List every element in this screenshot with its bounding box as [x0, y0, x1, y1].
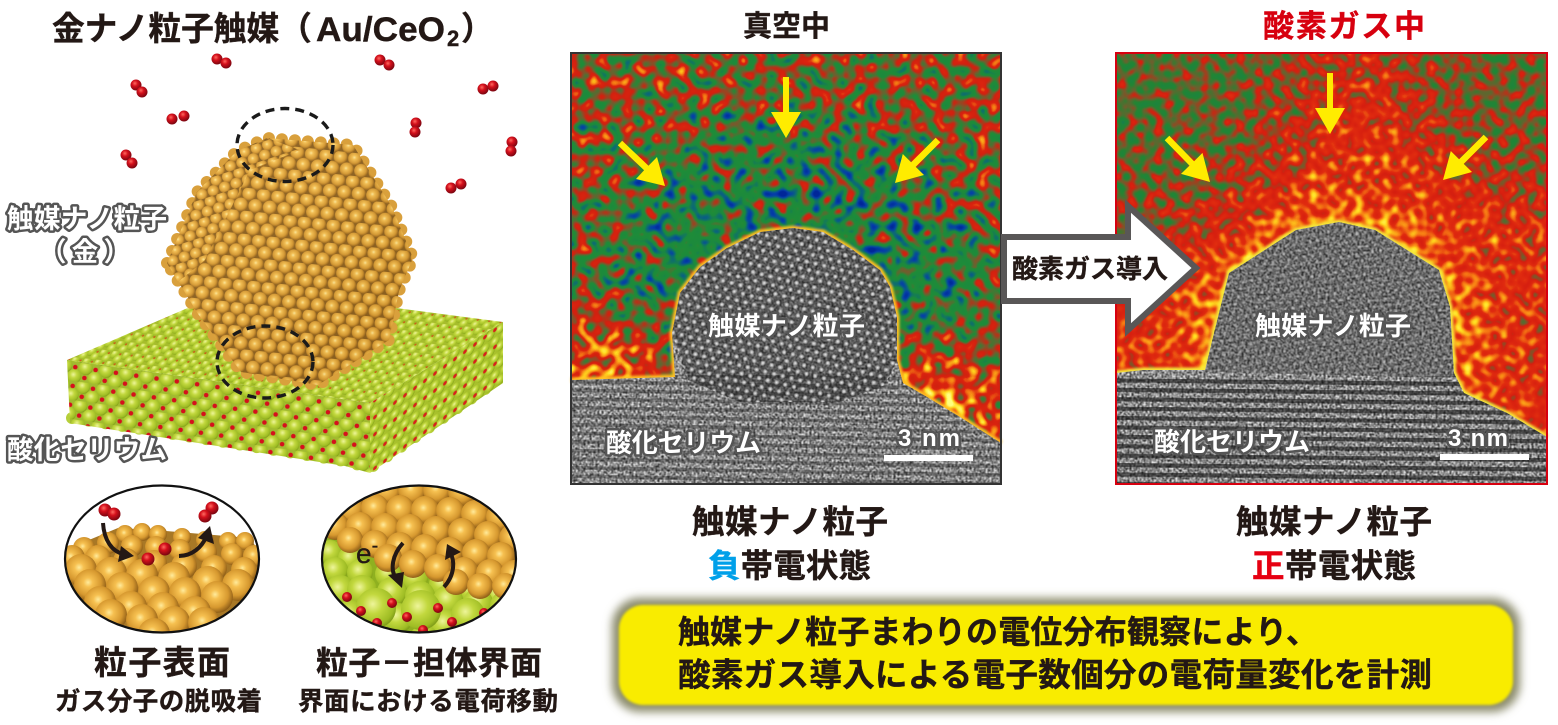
gold nanoparticle [167, 138, 413, 385]
arrow: adsorption [103, 523, 134, 562]
title: ） [461, 10, 494, 47]
label: catalyst nanoparticle (gold): 触媒ナノ粒子 [7, 204, 167, 234]
title [52, 10, 494, 51]
arrow: left [618, 141, 665, 186]
arrow: oxygen gas introduction [1004, 206, 1196, 330]
arrow: electron transfer to support [388, 543, 404, 588]
label: cerium oxide: 酸化セリウム [606, 428, 761, 458]
caption: particle-support interface: 粒子－担体界面 [316, 645, 542, 681]
callout: conclusion: 酸素ガス導入による電子数個分の電荷量変化を計測 [678, 657, 1432, 693]
label: cerium oxide: 酸化セリウム [1154, 427, 1310, 457]
panel: potential map in vacuum [571, 53, 1001, 485]
scale bar: 3 nm [1448, 425, 1508, 452]
scale bar: 3 nm [898, 425, 960, 452]
TEM image [571, 225, 1001, 485]
title: Au/CeO [316, 11, 445, 49]
heading: in oxygen gas: 酸素ガス中 [1263, 9, 1425, 44]
arrow: top [1315, 73, 1345, 134]
inset: particle-support interface [320, 484, 518, 634]
dashed circle: particle surface [237, 108, 333, 182]
callout: conclusion: 触媒ナノ粒子まわりの電位分布観察により、 [678, 614, 1318, 650]
arrow: top [771, 77, 801, 138]
scale bar [1440, 425, 1529, 460]
caption: particle surface [55, 644, 262, 716]
label: nanoparticle: 触媒ナノ粒子 [1255, 311, 1411, 341]
arrow: desorption [179, 526, 214, 556]
title: 金ナノ粒子触媒（ [52, 10, 312, 47]
electron label: e [356, 538, 372, 569]
oxygen gas molecules [120, 54, 518, 194]
caption: negative charge state: 触媒ナノ粒子 [692, 504, 888, 540]
inset: particle surface [64, 484, 260, 634]
panel: gold nanoparticle catalyst model [7, 54, 518, 473]
caption: particle surface: ガス分子の脱吸着 [55, 688, 262, 716]
caption: negative charge state: 負帯電状態 [708, 548, 871, 584]
arrow: oxygen gas introduction: 酸素ガス導入 [1012, 254, 1168, 284]
scale bar [884, 425, 973, 461]
potential map [571, 53, 1001, 484]
potential map [1116, 53, 1547, 484]
ceria support slab [67, 307, 503, 473]
TEM image [1116, 220, 1547, 485]
molecules on surface [98, 502, 218, 566]
caption: positive charge state [1236, 504, 1432, 584]
title: 2 [447, 26, 459, 51]
electron label: - [372, 535, 378, 557]
panel: potential map in oxygen [1116, 53, 1547, 485]
callout: conclusion [612, 598, 1520, 712]
label: nanoparticle: 触媒ナノ粒子 [708, 311, 865, 341]
caption: negative charge state [692, 504, 888, 584]
caption: particle surface: 粒子表面 [94, 644, 230, 681]
caption: positive charge state: 正帯電状態 [1252, 548, 1416, 584]
arrow: electron transfer to particle [444, 544, 461, 587]
caption: particle-support interface: 界面における電荷移動 [298, 688, 558, 716]
arrow: right [895, 138, 940, 183]
label: cerium oxide: 酸化セリウム [7, 435, 167, 465]
heading: in vacuum: 真空中 [743, 10, 830, 43]
arrow: left [1165, 136, 1210, 182]
caption: positive charge state: 触媒ナノ粒子 [1236, 504, 1432, 540]
dashed circle: particle-support interface [217, 326, 313, 398]
label: catalyst nanoparticle (gold): （金） [40, 237, 130, 267]
arrow: right [1443, 135, 1488, 180]
label: catalyst nanoparticle (gold) [7, 204, 167, 267]
caption: particle-support interface [298, 645, 558, 716]
